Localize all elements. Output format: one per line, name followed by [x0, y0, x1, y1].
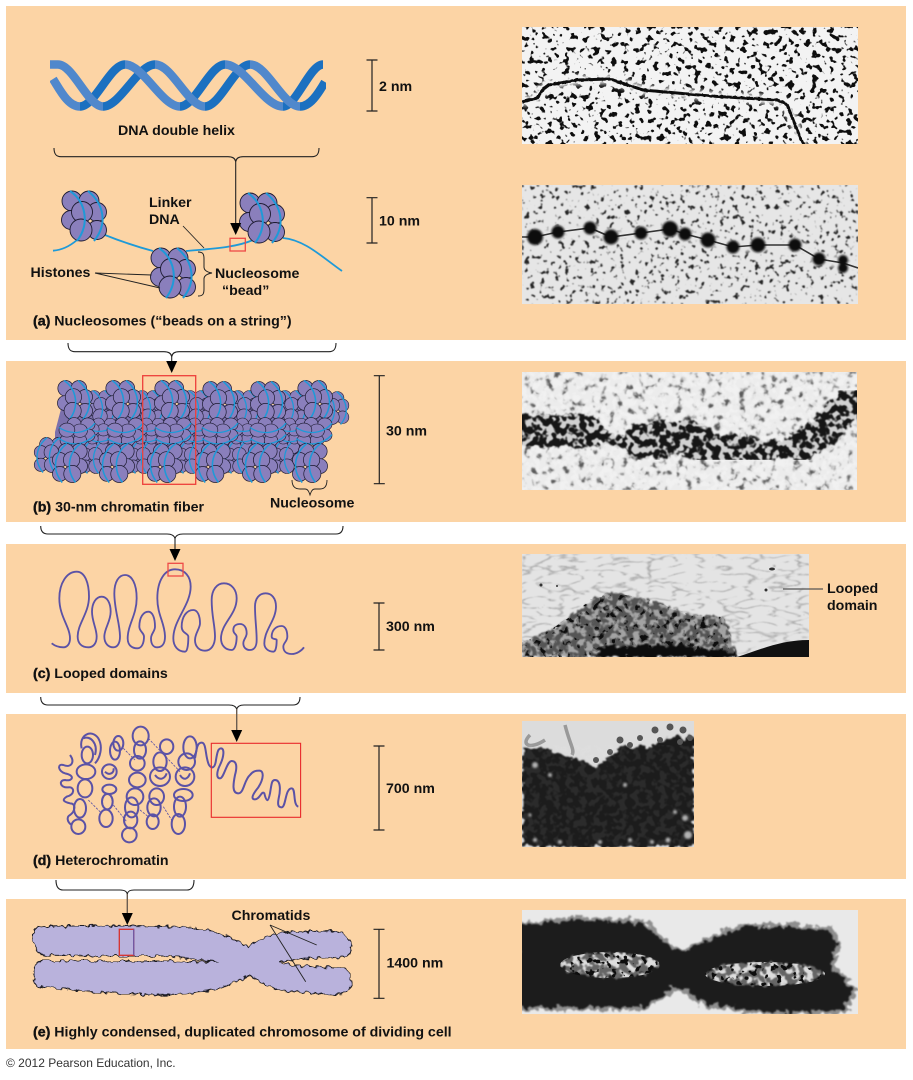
middle row of nucleosomes [59, 418, 332, 446]
scale bar: 700 nm [374, 746, 384, 830]
label: 700 nm: 700 nm [386, 781, 435, 797]
arrow: helix to linker [54, 148, 319, 235]
rear ribbon segments [80, 64, 325, 106]
panel: nucleosomes [6, 6, 906, 340]
nucleosome left [62, 191, 106, 241]
column 3 coils [122, 727, 149, 842]
micrograph: looped domains [522, 554, 809, 657]
panel: heterochromatin [6, 697, 906, 879]
zoom box on loop [168, 563, 183, 576]
label: 10 nm: 10 nm [379, 214, 420, 230]
front lower row of nucleosomes [52, 444, 328, 482]
panel: condensed chromosome [6, 880, 906, 1049]
label: Linker DNA: DNA [149, 212, 180, 228]
label: Nucleosome brace [270, 480, 354, 512]
label: 1400 nm: 1400 nm [386, 956, 443, 972]
label: 300 nm: 300 nm [386, 619, 435, 635]
label: Nucleosome bead: Nucleosome [215, 266, 299, 282]
arrow: nucleosomes to fiber [68, 343, 336, 373]
nucleosome centre [150, 248, 196, 298]
upper row of nucleosomes [57, 380, 333, 420]
scale bar: 30 nm [374, 376, 385, 484]
label: Looped domain: Looped [827, 581, 878, 597]
back row of nucleosomes [87, 390, 349, 424]
column 1 coils [59, 734, 101, 834]
scale bar: 2 nm [366, 60, 378, 111]
dashed connecting lines [88, 738, 180, 822]
label: Linker DNA [149, 195, 204, 248]
scale bar: 1400 nm [374, 929, 384, 998]
column 4 coils [147, 739, 173, 829]
micrograph: beads on a string [522, 185, 858, 304]
panel: 30-nm chromatin fiber [6, 343, 906, 522]
label: Nucleosome bead: “bead” [222, 283, 269, 299]
label: Nucleosome bead [198, 252, 299, 299]
lower back row [34, 438, 300, 474]
label: Looped domain [783, 581, 878, 614]
copyright: © 2012 Pearson Education, Inc. [6, 1056, 176, 1070]
linker DNA strand [53, 235, 342, 271]
label: Looped domain: domain [827, 598, 877, 614]
micrograph: chromatin fiber [522, 372, 860, 490]
zoom box on loops [211, 743, 301, 817]
micrograph: chromosome [518, 910, 858, 1014]
icon: DNA double helix [50, 64, 325, 106]
unfolded strand [195, 743, 298, 807]
arrow: loops to heterochromatin [41, 697, 300, 742]
micrograph: DNA strand [522, 27, 858, 146]
label: Histones: Histones [30, 265, 91, 281]
label: Histones [30, 265, 160, 288]
label: Chromatids: Chromatids [232, 908, 310, 924]
caption (c): (c) Looped domains [33, 666, 168, 682]
caption (e): (e) Highly condensed, duplicated chromosome of dividing cell [33, 1024, 452, 1040]
zoom box on linker DNA [230, 238, 245, 251]
panel: looped domains [6, 526, 906, 693]
scale bar: 10 nm [366, 198, 378, 243]
arrow: heterochromatin to chromosome [56, 880, 194, 925]
coiled heterochromatin [59, 727, 298, 842]
heading: DNA double helix: DNA double helix [118, 123, 235, 139]
column 5 coils [172, 736, 197, 834]
scale bar: 300 nm [374, 603, 384, 650]
nucleosome right [240, 193, 284, 243]
chromosome [33, 926, 352, 995]
label: Linker DNA: Linker [149, 195, 192, 211]
caption (d): (d) Heterochromatin [33, 853, 169, 869]
front ribbon segments [50, 64, 300, 106]
label: Chromatids [232, 908, 317, 982]
micrograph: heterochromatin [522, 721, 694, 847]
arrow: fiber to looped domain [41, 526, 343, 561]
looped chromatin strand [52, 569, 304, 654]
zoom box on fiber [143, 376, 196, 484]
label: 30 nm: 30 nm [386, 424, 427, 440]
label: Nucleosome brace: Nucleosome [270, 496, 354, 512]
chromatin fiber [34, 380, 349, 482]
label: 2 nm: 2 nm [379, 79, 412, 95]
caption (a): (a) Nucleosomes (“beads on a string”) [33, 314, 292, 330]
zoom box on chromosome [119, 929, 134, 955]
caption (b): (b) 30-nm chromatin fiber [33, 500, 205, 516]
column 2 coils [99, 736, 123, 827]
